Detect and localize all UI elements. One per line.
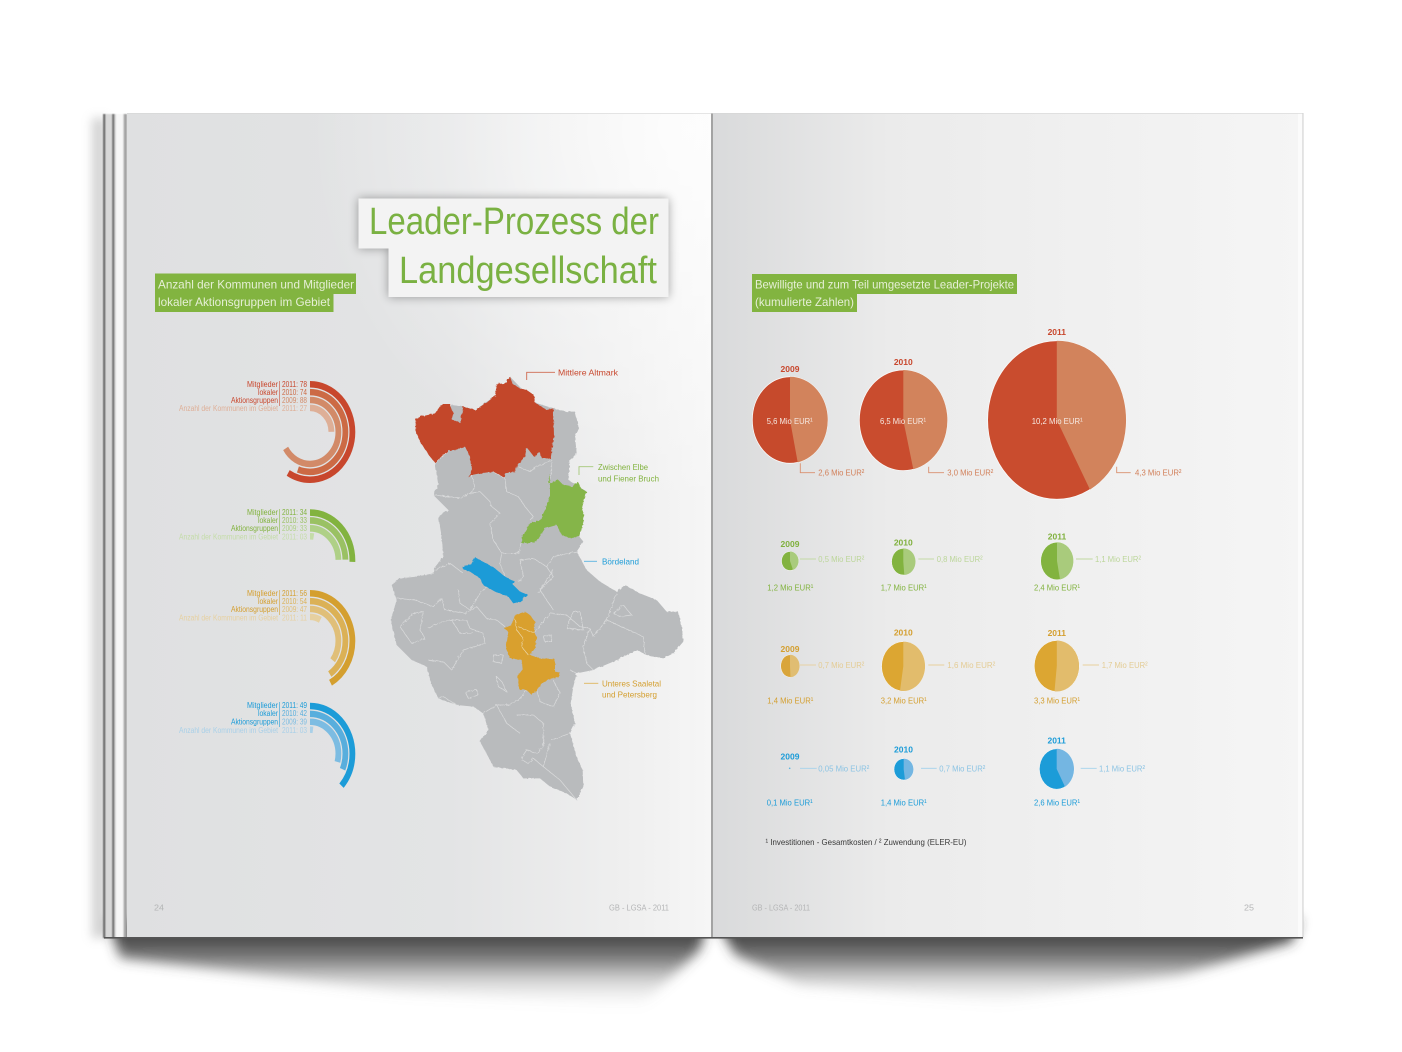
ring chart: red: Anzahl der Kommunen im Gebiet xyxy=(179,404,279,413)
book page edges xyxy=(103,114,127,938)
ring chart: blue: 2011: 49 xyxy=(282,701,307,710)
ring chart: gold: lokaler xyxy=(258,597,278,606)
ring chart: green: Aktionsgruppen xyxy=(231,524,278,533)
region: Mittlere Altmark xyxy=(416,377,554,477)
region: Bördeland xyxy=(463,557,528,603)
ring chart: green: 2009: 33 xyxy=(282,524,307,533)
ring chart: red: 2011: 27 xyxy=(282,404,307,413)
page number right: 25 xyxy=(1244,902,1254,912)
pie: red 2009: 2009 xyxy=(781,364,800,374)
pie: green 2009: 0,5 Mio EUR² xyxy=(818,554,864,564)
ring chart: red: 2010: 74 xyxy=(282,388,307,397)
pie: green 2010: 0,8 Mio EUR² xyxy=(937,554,983,564)
pie: green 2011 xyxy=(1034,532,1141,592)
ring chart: blue xyxy=(179,701,352,801)
pie: gold 2009: 2009 xyxy=(781,644,800,654)
pie: red 2010: 2010 xyxy=(894,357,913,367)
left heading: lokaler Aktionsgruppen im Gebiet xyxy=(158,295,331,309)
region: Unteres Saaletal und Petersberg xyxy=(504,612,560,695)
ring chart: green: 2011: 03 xyxy=(282,532,307,542)
footnote: ¹ Investitionen - Gesamtkosten / ² Zuwendung (ELER-EU) xyxy=(766,837,967,847)
spine fold xyxy=(711,113,713,937)
pie: gold 2009: 0,7 Mio EUR² xyxy=(818,660,864,670)
green pies xyxy=(767,532,1141,592)
right heading xyxy=(752,274,1017,312)
left heading: Anzahl der Kommunen und Mitglieder xyxy=(158,278,354,292)
ring chart: red: 2011: 78 xyxy=(282,380,307,389)
pie: gold 2011 xyxy=(1034,628,1148,706)
title line 1: Leader-Prozess der xyxy=(369,201,659,243)
pie: gold 2009: 1,4 Mio EUR¹ xyxy=(767,696,813,706)
right heading: (kumulierte Zahlen) xyxy=(755,295,854,309)
pie: gold 2009 xyxy=(767,644,864,706)
pie: gold 2010: 3,2 Mio EUR¹ xyxy=(881,696,927,706)
title line 2: Landgesellschaft xyxy=(399,250,657,292)
ring chart: blue: lokaler xyxy=(258,709,278,718)
pie: red 2010 xyxy=(859,357,993,478)
ring chart: gold: Aktionsgruppen xyxy=(231,605,278,614)
red pies xyxy=(752,327,1182,499)
pie: green 2011: 2,4 Mio EUR¹ xyxy=(1034,582,1080,592)
ring chart: green: lokaler xyxy=(258,516,278,525)
pie: red 2011: 4,3 Mio EUR² xyxy=(1135,468,1182,478)
pie: gold 2010: 1,6 Mio EUR² xyxy=(947,660,995,670)
pie: blue 2010: 0,7 Mio EUR² xyxy=(939,763,985,773)
pie: red 2011: 10,2 Mio EUR¹ xyxy=(1032,416,1083,426)
map base: grey districts xyxy=(391,377,683,800)
ring chart: gold: Mitglieder xyxy=(247,589,278,598)
ring chart: blue: Aktionsgruppen xyxy=(231,718,278,726)
district boundaries xyxy=(397,460,645,800)
pie: red 2009: 2,6 Mio EUR² xyxy=(818,468,864,478)
footer left: GB - LGSA - 2011 xyxy=(609,902,669,912)
pie: blue 2010: 1,4 Mio EUR¹ xyxy=(881,798,927,808)
pie: red 2010: 6,5 Mio EUR¹ xyxy=(880,416,926,426)
ring chart: red: Mitglieder xyxy=(247,380,278,389)
ring chart: red xyxy=(179,380,352,480)
map of Sachsen-Anhalt xyxy=(154,327,1254,912)
region: Zwischen Elbe und Fiener Bruch xyxy=(522,473,587,543)
title box xyxy=(358,198,668,297)
ring chart: green: Mitglieder xyxy=(247,508,278,517)
pie: green 2010 xyxy=(881,537,983,592)
pie: green 2011: 1,1 Mio EUR² xyxy=(1095,554,1141,564)
pie: blue 2010: 2010 xyxy=(894,744,913,754)
ring chart: blue: Anzahl der Kommunen im Gebiet xyxy=(179,726,279,735)
pie: green 2009: 1,2 Mio EUR¹ xyxy=(767,582,813,592)
pie: green 2010: 2010 xyxy=(894,537,913,547)
pie: green 2011: 2011 xyxy=(1048,532,1066,542)
page number left: 24 xyxy=(154,902,164,912)
label: Unteres Saaletal und Petersberg xyxy=(584,678,661,700)
label: Bördeland xyxy=(584,556,639,566)
ring chart: red: 2009: 88 xyxy=(282,396,307,405)
pie: blue 2010 xyxy=(881,744,985,808)
ring chart: gold: 2011: 11 xyxy=(282,614,307,622)
label: Bördeland: Bördeland xyxy=(602,556,639,566)
book shadow xyxy=(92,118,1300,1006)
pie: red 2010: 3,0 Mio EUR² xyxy=(947,468,993,478)
pie: gold 2011: 1,7 Mio EUR² xyxy=(1102,660,1148,670)
ring chart: gold: 2010: 54 xyxy=(282,597,307,606)
pie: green 2010: 1,7 Mio EUR¹ xyxy=(881,582,927,592)
gold pies xyxy=(767,627,1148,706)
label: Unteres Saaletal und Petersberg: und Petersberg xyxy=(602,690,657,700)
pie: blue 2011: 2011 xyxy=(1047,735,1066,745)
ring chart: red: lokaler xyxy=(258,388,278,397)
left page xyxy=(127,113,712,937)
pie: gold 2011: 2011 xyxy=(1048,628,1066,638)
ring chart: blue: 2011: 03 xyxy=(282,726,307,735)
pie: green 2009: 2009 xyxy=(781,539,800,549)
label: Mittlere Altmark xyxy=(527,368,619,380)
label: Unteres Saaletal und Petersberg: Unteres Saaletal xyxy=(602,678,661,688)
pie: blue 2009: 0,05 Mio EUR² xyxy=(818,763,869,773)
ring chart: green: 2010: 33 xyxy=(282,516,307,525)
right page xyxy=(712,113,1304,937)
ring chart: gold: 2009: 47 xyxy=(282,605,307,614)
ring chart: gold xyxy=(179,589,352,689)
blue pies xyxy=(767,735,1145,808)
ring chart: gold: 2011: 56 xyxy=(282,589,307,598)
ring chart: red: Aktionsgruppen xyxy=(231,396,278,405)
pie: gold 2011: 3,3 Mio EUR¹ xyxy=(1034,696,1080,706)
ring chart: green: Anzahl der Kommunen im Gebiet xyxy=(179,532,279,542)
page bottom edge xyxy=(104,113,1303,939)
left heading xyxy=(155,274,356,312)
pie: red 2009 xyxy=(752,364,864,478)
pie: red 2009: 5,6 Mio EUR¹ xyxy=(767,416,813,426)
right heading: Bewilligte und zum Teil umgesetzte Leader-Projekte xyxy=(755,278,1014,292)
pie: blue 2011 xyxy=(1034,735,1145,808)
ring chart: gold: Anzahl der Kommunen im Gebiet xyxy=(179,614,279,622)
pie: gold 2010: 2010 xyxy=(894,627,913,637)
pie: red 2011: 2011 xyxy=(1048,327,1066,337)
label: Zwischen Elbe und Fiener Bruch xyxy=(579,462,659,484)
pie: blue 2009: 2009 xyxy=(781,752,800,762)
pie: gold 2010 xyxy=(881,627,995,706)
ring chart: green: 2011: 34 xyxy=(282,508,307,517)
footer right: GB - LGSA - 2011 xyxy=(752,902,810,912)
pie: blue 2009 xyxy=(767,752,869,808)
label: Mittlere Altmark: Mittlere Altmark xyxy=(558,368,619,378)
ring chart: blue: 2009: 39 xyxy=(282,718,307,726)
pie: blue 2009: 0,1 Mio EUR¹ xyxy=(767,798,813,808)
pie: blue 2011: 2,6 Mio EUR¹ xyxy=(1034,798,1080,808)
pie: blue 2011: 1,1 Mio EUR² xyxy=(1099,763,1145,773)
pie: green 2009 xyxy=(767,539,864,592)
pie: red 2011 xyxy=(988,327,1182,499)
ring chart: blue: Mitglieder xyxy=(247,701,278,710)
label: Zwischen Elbe und Fiener Bruch: und Fiener Bruch xyxy=(598,474,659,484)
ring chart: blue: 2010: 42 xyxy=(282,709,307,718)
ring chart: green xyxy=(179,508,352,608)
label: Zwischen Elbe und Fiener Bruch: Zwischen Elbe xyxy=(598,462,648,472)
